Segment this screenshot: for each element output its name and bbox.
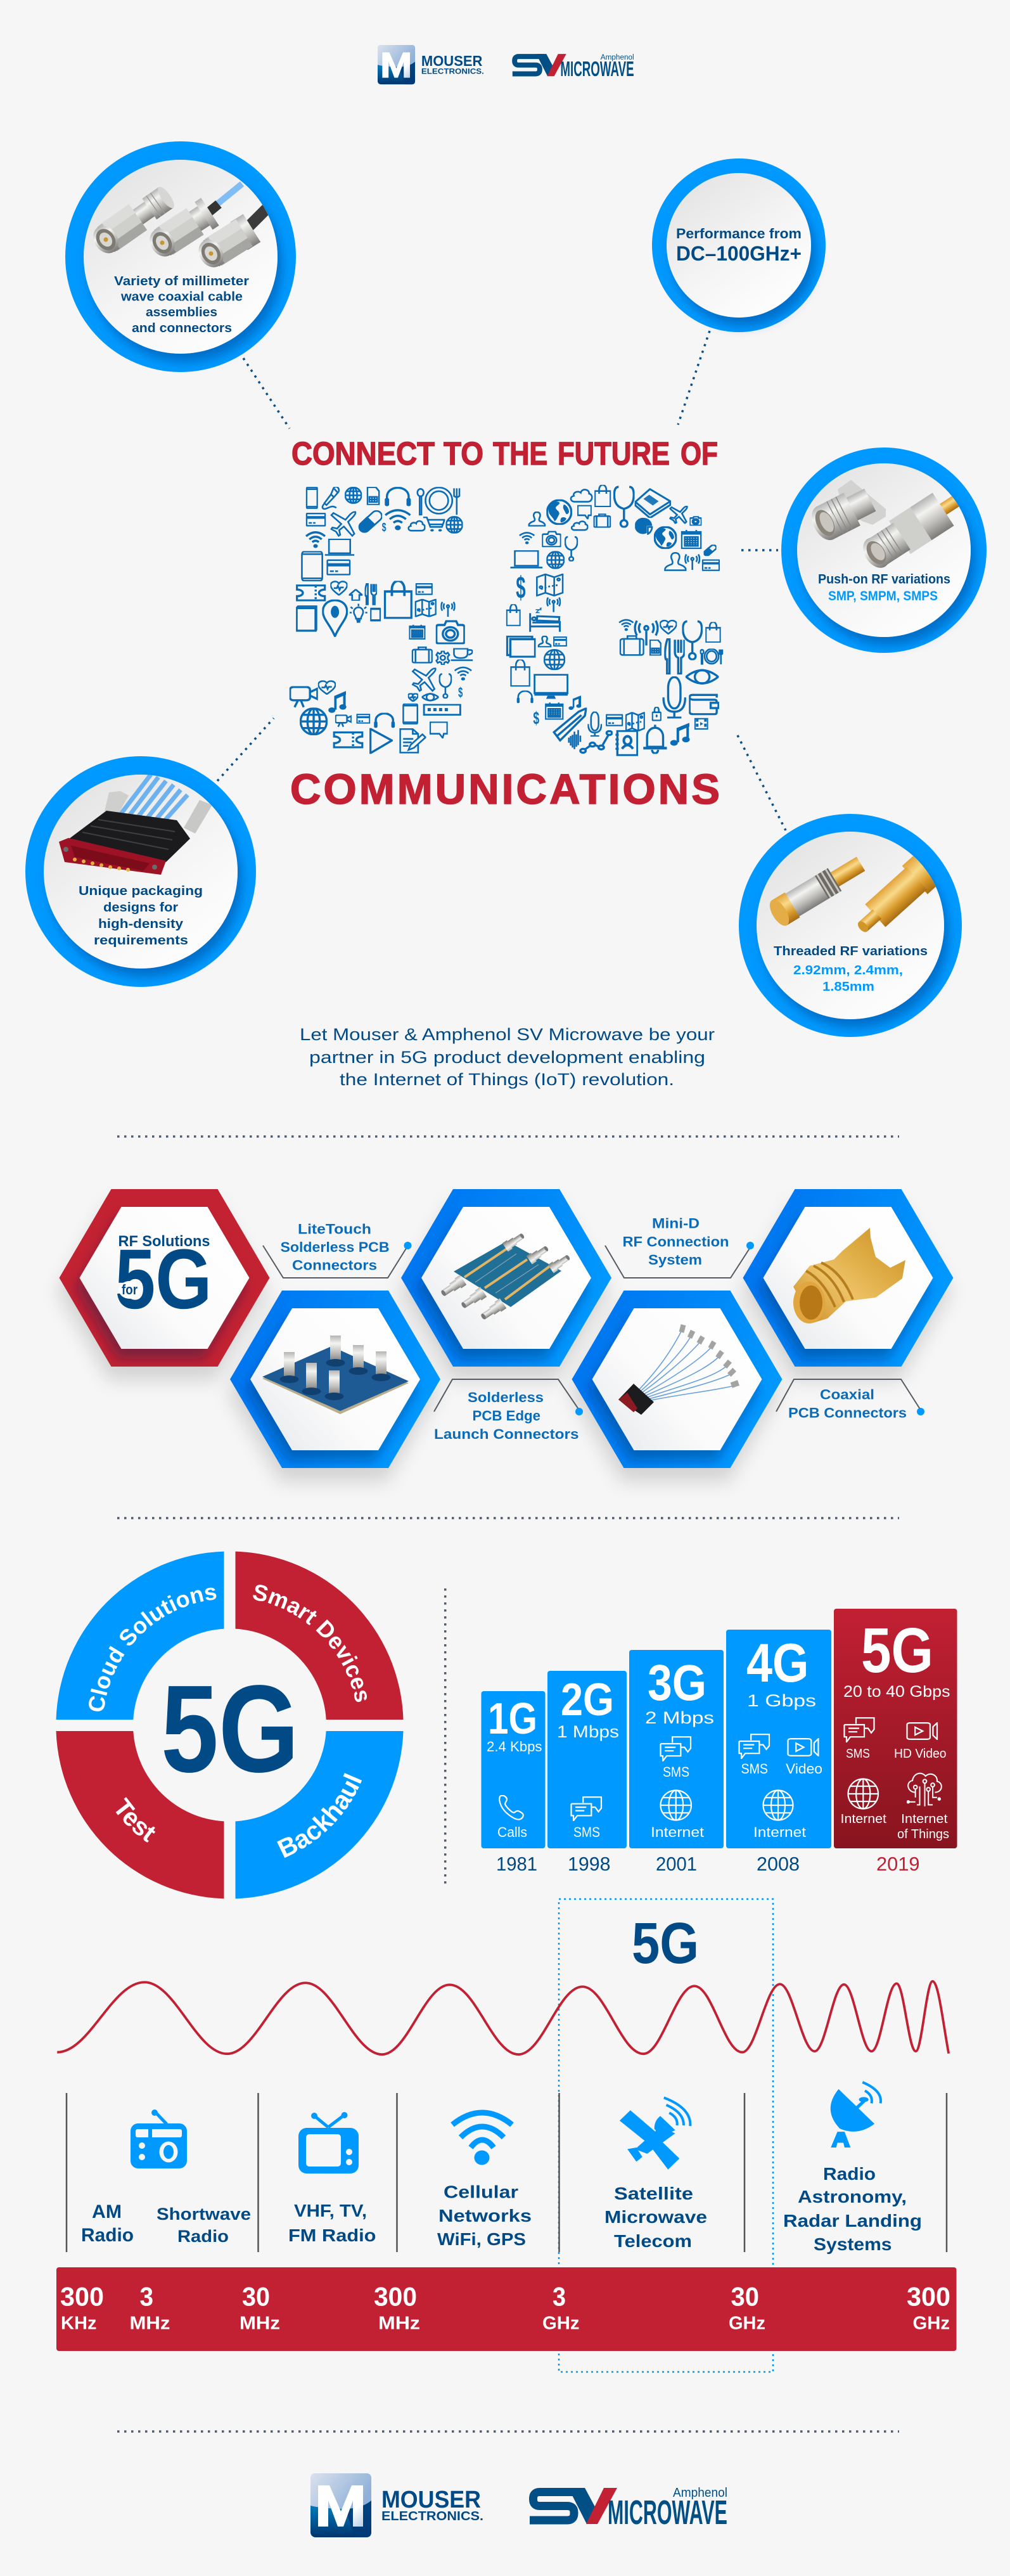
text: coaxial caption — [114, 274, 249, 335]
text: band labels: Networks — [438, 2206, 532, 2225]
text: threaded caption: Threaded RF variations — [774, 944, 928, 958]
photo: gold PCB connector — [793, 1228, 905, 1323]
callout: solderless edge launch label: Solderless — [468, 1389, 544, 1405]
chart: generations bar 5G: Internet — [901, 1812, 948, 1826]
chart: generations bar 3G: 2 Mbps — [645, 1708, 714, 1727]
chart: generations bar 4G: 4G — [746, 1633, 809, 1694]
text: band labels: AM — [92, 2201, 122, 2222]
text: band labels: Microwave — [604, 2207, 707, 2227]
chart: generations bar 4G: 1 Gbps — [747, 1691, 816, 1710]
panel: unique packaging circle — [25, 756, 256, 987]
frequency scale bar: GHz — [912, 2314, 950, 2334]
text: center 5G: 5G — [161, 1659, 299, 1798]
text: packaging caption: requirements — [94, 934, 188, 948]
callout: Mini-D label: RF Connection — [622, 1233, 729, 1250]
text: performance — [676, 226, 802, 265]
text: band labels — [81, 2164, 922, 2254]
text: band labels: Cellular — [444, 2182, 518, 2202]
text: 5G: 5G — [115, 1232, 212, 1327]
photo: LiteTouch board — [438, 1231, 572, 1322]
text block: partner statement: partner in 5G product development enabling — [309, 1048, 705, 1067]
panel: hexagon cable harness product — [572, 1291, 782, 1468]
frequency scale bar: 3 — [139, 2282, 153, 2311]
callout: coaxial PCB label: PCB Connectors — [788, 1405, 907, 1421]
text block: partner statement: Let Mouser & Amphenol SV Microwave be your — [300, 1025, 715, 1044]
text: RF solutions: RF Solutions — [118, 1233, 210, 1250]
chart: generations bar 3G — [629, 1650, 724, 1875]
chart: generations bar 4G: 2008 — [757, 1853, 800, 1875]
logo: Mouser and SV Microwave (bottom): MOUSER — [381, 2487, 481, 2513]
logo: Mouser and SV Microwave (top): MOUSER — [421, 53, 483, 69]
photo: push-on connectors — [812, 480, 959, 568]
photo: blue PCB with connectors — [262, 1336, 409, 1414]
chart: generations bar 5G: 2019 — [876, 1853, 920, 1875]
panel: performance circle — [652, 158, 826, 332]
text block: partner statement — [300, 1025, 715, 1089]
wave line — [57, 1981, 949, 2054]
frequency scale bar: MHz — [129, 2314, 170, 2334]
text: coaxial caption: and connectors — [132, 321, 232, 335]
icon: radio — [131, 2109, 187, 2168]
frequency scale bar: 300 — [374, 2282, 417, 2311]
text: smart devices: Smart Devices — [253, 1585, 367, 1703]
frequency scale bar: GHz — [729, 2314, 765, 2334]
panel: hexagon solderless edge launch product — [230, 1291, 440, 1468]
text: threaded caption — [774, 944, 928, 994]
text: spectrum 5G: 5G — [632, 1911, 699, 1976]
text: push-on caption: SMP, SMPM, SMPS — [828, 589, 938, 603]
heading: connect to the future of: THE — [493, 435, 547, 472]
chart: generations bar 5G: Internet — [840, 1812, 886, 1826]
chart: generations bar 2G: 1 Mbps — [557, 1722, 619, 1741]
text: packaging caption: high-density — [98, 917, 184, 931]
icon: wifi — [452, 2113, 512, 2165]
callout: LiteTouch label: Connectors — [292, 1258, 377, 1273]
frequency scale bar: GHz — [542, 2314, 579, 2334]
callout: Mini-D label: Mini-D — [652, 1216, 700, 1231]
text: band labels: WiFi, GPS — [437, 2229, 526, 2249]
text: push-on caption: Push-on RF variations — [818, 572, 950, 587]
text: coaxial caption: wave coaxial cable — [120, 290, 243, 304]
chart: frequency spectrum — [56, 1899, 957, 2372]
heading: connect to the future of: FUTURE — [558, 435, 670, 472]
text: push-on caption — [818, 572, 950, 603]
chart: generations bar 1G: 2.4 Kbps — [487, 1739, 542, 1755]
text: band labels: VHF, TV, — [294, 2201, 367, 2220]
panel: hexagon LiteTouch product — [401, 1189, 611, 1367]
callout: solderless edge launch label: PCB Edge — [473, 1408, 540, 1424]
frequency scale bar — [56, 2267, 957, 2351]
panel: coaxial cable assemblies circle — [65, 141, 296, 372]
logo: Mouser and SV Microwave (top) — [378, 45, 634, 84]
callout: solderless edge launch label: Launch Connectors — [434, 1426, 579, 1442]
text: band labels: Radar Landing — [783, 2211, 922, 2231]
callout: coaxial PCB label: Coaxial — [820, 1387, 874, 1402]
heading: connect to the future of — [291, 435, 718, 472]
chart: generations bar 1G: 1981 — [496, 1853, 537, 1875]
callout: Mini-D label: System — [648, 1252, 702, 1268]
text: band labels: Telecom — [614, 2231, 692, 2251]
frequency scale bar: 30 — [731, 2282, 759, 2311]
chart: generations bar 3G: 2001 — [656, 1853, 697, 1875]
callout: LiteTouch label: Solderless PCB — [280, 1239, 389, 1255]
text: band labels: Radio — [81, 2225, 134, 2246]
chart: generations bar 5G — [834, 1609, 957, 1875]
chart: generations bar 3G: 3G — [648, 1654, 706, 1711]
chart: generations bar 4G — [726, 1630, 831, 1875]
chart: 5G ring — [56, 1552, 403, 1899]
heading: connect to the future of: OF — [681, 435, 718, 472]
chart: generations bar 2G — [547, 1671, 627, 1875]
heading: connect to the future of: TO — [444, 435, 483, 472]
chart: generations bar 4G: Video — [786, 1761, 822, 1777]
text: packaging caption: Unique packaging — [79, 884, 203, 898]
photo: three coaxial connectors — [87, 182, 269, 274]
chart: generations bar 2G: 2G — [561, 1675, 614, 1725]
text: threaded caption: 2.92mm, 2.4mm, — [793, 963, 903, 977]
logo: Mouser and SV Microwave (bottom) — [310, 2473, 727, 2537]
frequency scale bar: 30 — [242, 2282, 270, 2311]
chart: generations bar 5G: HD Video — [894, 1747, 947, 1761]
icon: radio telescope — [831, 2082, 881, 2148]
logo: Mouser and SV Microwave (bottom): ELECTRONICS. — [381, 2509, 483, 2523]
panel: push-on RF circle — [781, 448, 987, 653]
frequency scale bar: 300 — [907, 2282, 950, 2311]
text block: partner statement: the Internet of Things (IoT) revolution. — [340, 1070, 674, 1089]
text: backhaul: Backhaul — [277, 1773, 362, 1858]
text: coaxial caption: Variety of millimeter — [114, 274, 249, 288]
panel: hexagon RF solutions for 5G — [60, 1189, 270, 1367]
text: band labels: Shortwave — [157, 2205, 251, 2224]
callout: solderless edge launch label — [434, 1379, 583, 1442]
text: band labels: FM Radio — [288, 2225, 376, 2245]
text: band labels: Systems — [814, 2234, 892, 2254]
photo: high-density connector — [59, 775, 212, 875]
chart: generations bar 4G: Internet — [753, 1824, 806, 1840]
chart: generations bar 5G: 5G — [861, 1615, 933, 1686]
text: band labels: Astronomy, — [798, 2187, 907, 2206]
frequency scale bar: MHz — [378, 2314, 420, 2334]
text: band labels: Satellite — [614, 2184, 693, 2203]
frequency scale bar: 300 — [60, 2282, 104, 2311]
frequency scale bar: 3 — [553, 2282, 566, 2311]
logo: Mouser and SV Microwave (bottom): MICROWAVE — [608, 2494, 727, 2532]
chart: generations bar 5G: 20 to 40 Gbps — [843, 1683, 950, 1701]
text: performance: DC–100GHz+ — [676, 242, 802, 265]
logo: Mouser and SV Microwave (top): ELECTRONICS. — [421, 67, 484, 76]
icon: satellite — [620, 2097, 690, 2170]
panel: hexagon Mini-D product — [743, 1189, 953, 1367]
chart: generations bar 5G: of Things — [897, 1827, 949, 1841]
callout: coaxial PCB label — [776, 1379, 924, 1421]
callout: LiteTouch label — [263, 1221, 412, 1278]
text: threaded caption: 1.85mm — [822, 980, 874, 994]
chart: generations bar 3G: Internet — [651, 1824, 704, 1840]
icon: TV — [298, 2112, 359, 2174]
text: packaging caption — [79, 884, 203, 948]
photo: threaded connectors — [769, 856, 936, 932]
heading: communications: COMMUNICATIONS — [290, 766, 720, 813]
text: packaging caption: designs for — [103, 901, 178, 915]
chart: generations bar 2G: SMS — [573, 1824, 600, 1840]
chart: generations bar 1G: Calls — [497, 1824, 527, 1840]
chart: generations bar 5G: SMS — [846, 1747, 870, 1761]
text: cloud solutions: Cloud Solutions — [89, 1587, 217, 1711]
callout: Mini-D label — [605, 1216, 754, 1278]
text: coaxial caption: assemblies — [146, 306, 217, 319]
icon cluster: letter G made of icons — [507, 485, 722, 755]
photo: RF cable harness — [618, 1324, 739, 1415]
panel: threaded RF circle — [739, 814, 962, 1037]
heading: connect to the future of: CONNECT — [291, 435, 435, 472]
dotted connectors from circles to title — [217, 331, 786, 830]
frequency scale bar: MHz — [240, 2314, 280, 2334]
chart: generations bar 1G — [482, 1691, 545, 1875]
text: band labels: Radio — [177, 2227, 229, 2246]
frequency scale bar: KHz — [61, 2314, 96, 2334]
chart: generations bar 3G: SMS — [663, 1764, 689, 1780]
chart: generations bar 2G: 1998 — [568, 1853, 611, 1875]
logo: Mouser and SV Microwave (top): Amphenol — [601, 53, 634, 61]
icon cluster: digit 5 made of icons — [290, 487, 473, 753]
logo: Mouser and SV Microwave (bottom): Amphenol — [673, 2486, 727, 2500]
text: for: for — [122, 1282, 137, 1298]
chart: generations bar 1G: 1G — [488, 1694, 537, 1743]
callout: LiteTouch label: LiteTouch — [298, 1221, 371, 1237]
text: band labels: Radio — [823, 2164, 876, 2184]
text: performance: Performance from — [676, 226, 802, 242]
text: test: Test — [115, 1797, 156, 1843]
chart: generations bar 4G: SMS — [741, 1761, 768, 1777]
logo: Mouser and SV Microwave (top): MICROWAVE — [560, 58, 634, 81]
